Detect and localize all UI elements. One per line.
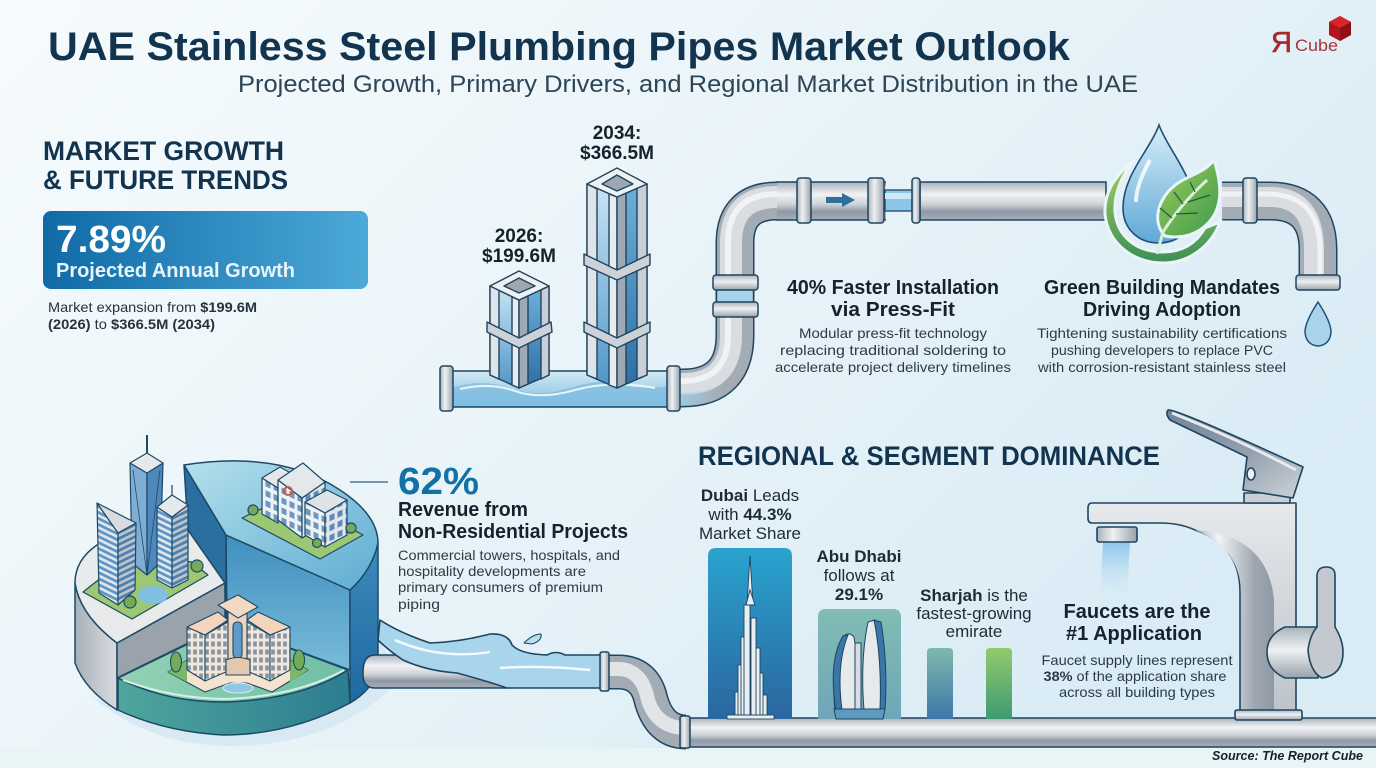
text: market expansion line 2: (2026) to $366.5M (2034) xyxy=(48,316,215,332)
label: 2034 value: 2034: xyxy=(593,123,641,144)
icon: falling drop xyxy=(1305,302,1331,346)
label: Sharjah: Sharjah is the xyxy=(920,586,1028,605)
pipe flange xyxy=(680,716,690,748)
text: faucets: across all building types xyxy=(1059,684,1215,700)
bar: Dubai xyxy=(708,548,792,719)
stat: 62 percent revenue: hospitality developments are xyxy=(398,563,586,579)
text: press-fit: accelerate project delivery timelines xyxy=(775,359,1011,375)
text: green building xyxy=(1037,277,1287,375)
chart column: 2026 xyxy=(487,271,552,388)
stat: 62 percent revenue: piping xyxy=(398,596,440,612)
label: Abu Dhabi xyxy=(816,547,902,604)
icon: Burj Khalifa xyxy=(727,556,774,719)
text: faucets: Faucets are the xyxy=(1064,601,1210,623)
text: green building: Green Building Mandates xyxy=(1044,277,1280,299)
source note: Source: The Report Cube xyxy=(1212,749,1363,763)
heading: market growth xyxy=(43,136,288,195)
text: green building: with corrosion-resistant stainless steel xyxy=(1037,359,1286,375)
bar: Abu Dhabi xyxy=(818,609,901,719)
label: 2026 value: $199.6M xyxy=(482,246,556,267)
stat: 62 percent revenue: Non-Residential Projects xyxy=(398,521,628,543)
pipe: drop to bottom main xyxy=(600,652,686,732)
pipe: bottom water chart base xyxy=(440,366,680,411)
label: Abu Dhabi: follows at xyxy=(824,566,895,585)
text: press-fit: Modular press-fit technology xyxy=(799,325,987,341)
label: 2026 value xyxy=(482,226,556,267)
label: Abu Dhabi: 29.1% xyxy=(835,585,883,604)
text: faucets: 38% of the application share xyxy=(1044,668,1227,684)
icon: water drop and leaf xyxy=(1105,125,1220,263)
pie wedge: commercial blue xyxy=(184,461,378,703)
label: Dubai: with 44.3% xyxy=(707,505,792,524)
leader line xyxy=(350,481,388,483)
stat: 62 percent revenue: Commercial towers, hospitals, and xyxy=(398,547,620,563)
icon: faucet xyxy=(1088,410,1343,720)
text: press-fit: replacing traditional soldering to xyxy=(780,342,1006,358)
logo: Я xyxy=(1271,27,1292,59)
stat: 62 percent revenue: primary consumers of premium xyxy=(398,579,603,595)
text: faucets: Faucet supply lines represent xyxy=(1042,652,1233,668)
pie chart: revenue by project type xyxy=(75,435,400,746)
logo: Cube xyxy=(1295,37,1338,55)
text: green building: Tightening sustainability certifications xyxy=(1037,325,1287,341)
title: UAE Stainless Steel Plumbing Pipes Market Outlook xyxy=(48,25,1071,69)
icon: twin towers xyxy=(833,620,886,719)
label: Abu Dhabi: Abu Dhabi xyxy=(816,547,902,566)
callout: annual growth card: 7.89% xyxy=(56,219,166,261)
text: green building: pushing developers to replace PVC xyxy=(1051,342,1273,358)
label: Dubai: Market Share xyxy=(699,524,801,543)
icon: office towers xyxy=(83,435,208,619)
label: 2034 value: $366.5M xyxy=(580,143,654,164)
heading: market growth: MARKET GROWTH xyxy=(43,136,284,166)
logo xyxy=(1271,16,1351,59)
label: Sharjah xyxy=(916,586,1032,641)
callout: annual growth card xyxy=(43,211,368,289)
icon: hospital xyxy=(242,463,363,559)
chart column: 2034 xyxy=(584,168,650,388)
bottom strip xyxy=(0,748,1376,768)
bar: Sharjah 2 xyxy=(986,648,1012,719)
stat: 62 percent revenue xyxy=(398,461,628,612)
pipe: water bursting from chart xyxy=(363,620,601,688)
pie wedge: residential grey xyxy=(75,530,225,710)
text: faucets xyxy=(1042,601,1233,700)
callout: annual growth card: Projected Annual Growth xyxy=(56,260,295,282)
pipe: bottom main xyxy=(685,718,1376,747)
arrow: flow direction xyxy=(826,193,855,207)
icon: hotel xyxy=(168,595,308,693)
stat: 62 percent revenue: Revenue from xyxy=(398,499,528,521)
pie wedge: hospitality green xyxy=(118,465,350,735)
text: press-fit: 40% Faster Installation xyxy=(787,277,999,299)
text: green building: Driving Adoption xyxy=(1083,299,1241,321)
text: market expansion: Market expansion from $199.6M xyxy=(48,299,257,315)
label: Sharjah: emirate xyxy=(946,622,1002,641)
pipe system: upper route xyxy=(672,178,1340,399)
subtitle: Projected Growth, Primary Drivers, and Regional Market Distribution in the UAE xyxy=(238,71,1138,98)
heading: regional dominance: REGIONAL & SEGMENT DOMINANCE xyxy=(698,441,1160,471)
stat: 62 percent revenue: 62% xyxy=(398,461,479,503)
text: press-fit: via Press-Fit xyxy=(831,299,955,321)
text: faucets: #1 Application xyxy=(1066,623,1202,645)
label: Sharjah: fastest-growing xyxy=(916,604,1032,623)
label: Dubai: Dubai Leads xyxy=(701,486,799,505)
label: Dubai xyxy=(699,486,801,543)
label: 2034 value xyxy=(580,123,654,164)
text: press-fit xyxy=(775,277,1011,375)
heading: market growth: & FUTURE TRENDS xyxy=(43,165,288,195)
label: 2026 value: 2026: xyxy=(495,226,543,247)
bar: Sharjah 1 xyxy=(927,648,953,719)
